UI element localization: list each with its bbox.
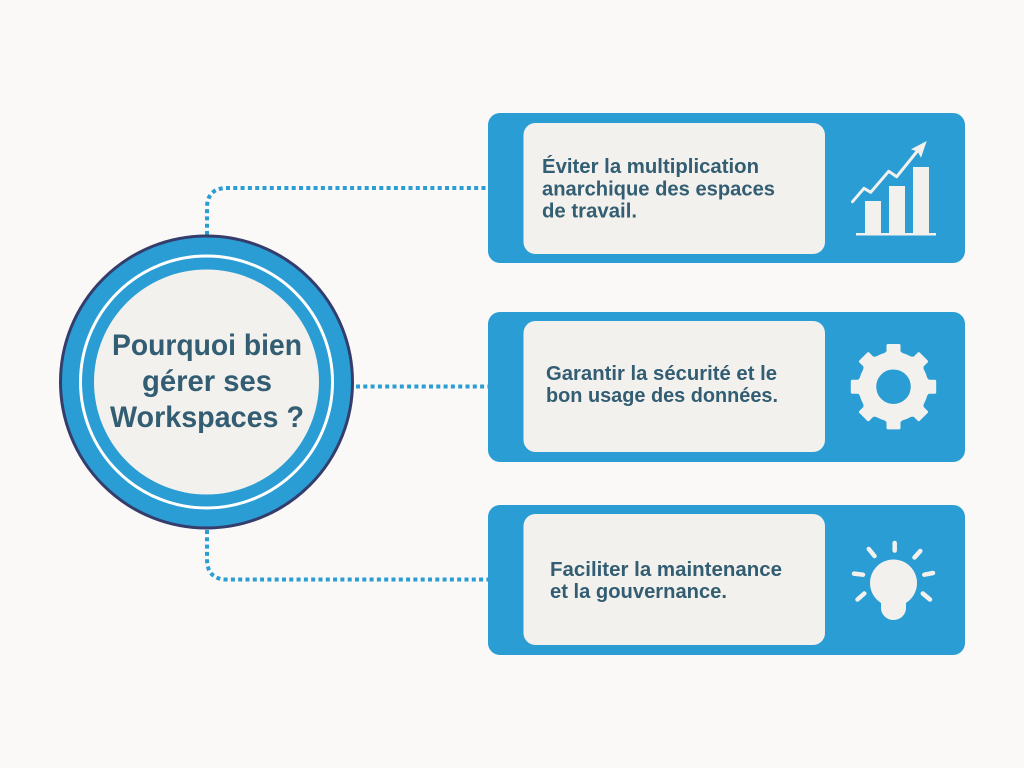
connector: bottom xyxy=(207,530,488,580)
central title: Workspaces ? xyxy=(110,401,304,434)
card 3 text: Faciliter la maintenance xyxy=(550,558,782,581)
card 1 text xyxy=(542,155,775,222)
card 2 text: Garantir la sécurité et le xyxy=(546,362,777,385)
card 2 text: bon usage des données. xyxy=(546,384,778,407)
card 1 text: anarchique des espaces xyxy=(542,178,775,200)
card 3 text: et la gouvernance. xyxy=(550,580,727,603)
connector: middle xyxy=(356,384,488,388)
panel: card 2 xyxy=(488,312,965,462)
central title: Pourquoi bien xyxy=(112,329,302,362)
icon: gear xyxy=(852,346,935,428)
connector: top xyxy=(207,188,488,235)
panel: card 1 xyxy=(488,113,965,263)
central title xyxy=(110,329,304,434)
panel: card 3 xyxy=(488,505,965,655)
card 1 text: Éviter la multiplication xyxy=(542,155,759,178)
card 3 text xyxy=(550,558,782,603)
central title: gérer ses xyxy=(142,365,272,398)
icon: light bulb xyxy=(854,543,933,620)
card 2 text xyxy=(546,362,778,407)
icon: growth bar chart xyxy=(852,141,936,236)
central circle xyxy=(60,236,352,528)
card 1 text: de travail. xyxy=(542,200,637,222)
